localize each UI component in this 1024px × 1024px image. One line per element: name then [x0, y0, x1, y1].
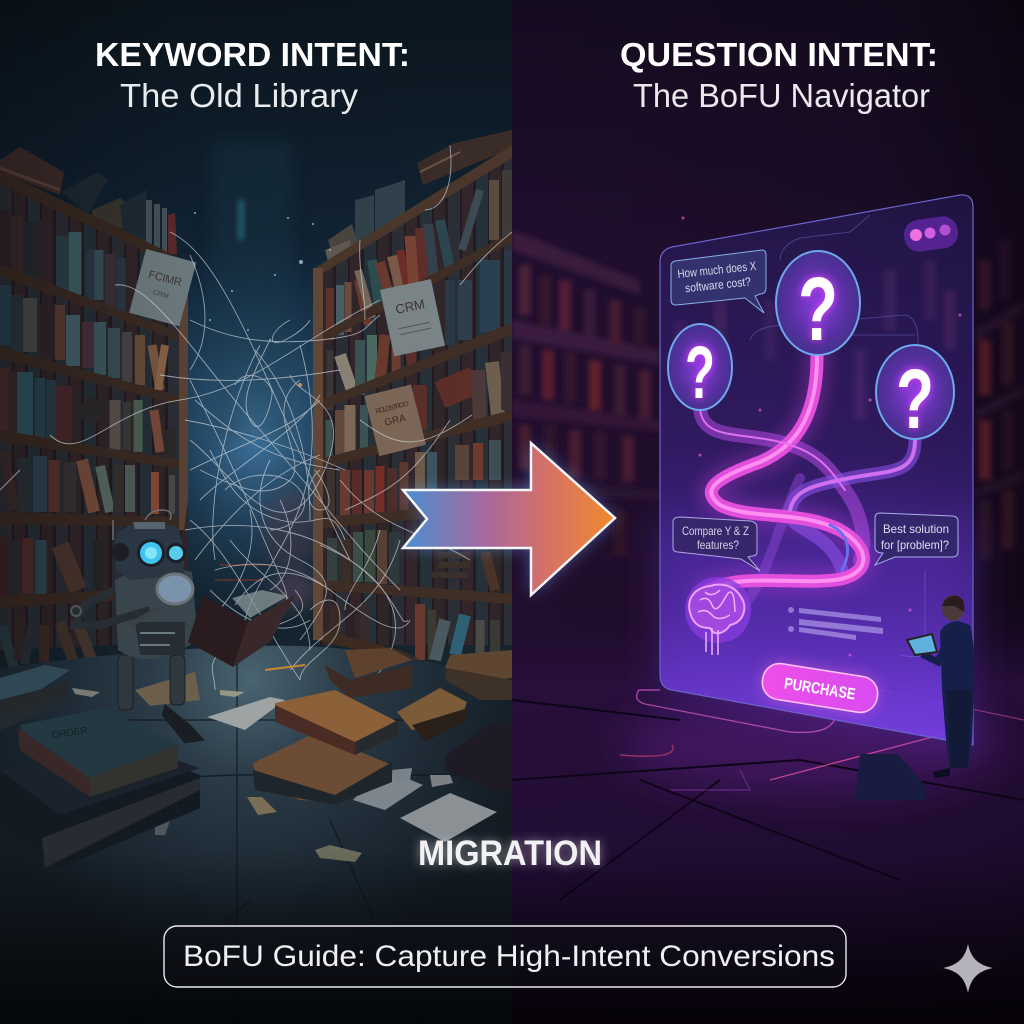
pink flow streams [700, 352, 915, 605]
magnifying glass [130, 574, 193, 625]
heading: keyword intent: The Old Library [120, 77, 359, 114]
speech bubble: software cost: software cost? [684, 274, 752, 295]
speech bubble: best solution [875, 513, 958, 565]
dust particles [194, 212, 331, 387]
icon: sparkle watermark [943, 944, 993, 993]
footer pill: guide [164, 926, 846, 987]
question bubble: center [776, 251, 860, 360]
icon: robot with magnifying glass and open book [71, 510, 295, 743]
tangled wires [0, 145, 512, 690]
books on top of left shelf [0, 147, 177, 262]
panel: right BoFU navigator scene [512, 0, 1024, 1024]
question bubble: left: ? [685, 331, 715, 414]
robot antenna [113, 510, 171, 540]
labeled book: CRM right: CRM [394, 296, 426, 317]
labeled book: CRM left: FCIMR [147, 269, 183, 289]
robot legs [118, 655, 204, 743]
right book row 5 [332, 530, 495, 590]
robot head [115, 522, 184, 580]
label: migration: MIGRATION [418, 834, 602, 873]
scattered floor papers [72, 665, 497, 862]
large teal and dark books: ORDER [51, 726, 88, 741]
icon: glowing brain [685, 577, 751, 655]
speech bubble: best solution: for [problem]? [881, 538, 949, 552]
books on top of right shelf [325, 130, 512, 262]
right book row 2 [330, 250, 510, 410]
question bubble: center: ? [798, 260, 838, 360]
right book row 6 [335, 604, 495, 660]
floor [8, 646, 512, 924]
purchase button: PURCHASE [783, 675, 857, 704]
robot body [115, 568, 198, 659]
arrow: migration [403, 443, 615, 595]
person holding tablet [907, 595, 974, 778]
book row 4 [4, 452, 172, 514]
labeled book: CRM right [380, 279, 445, 356]
speech bubble: compare: Compare Y & Z [682, 524, 749, 538]
floor with circuit lines [512, 600, 1024, 1024]
labeled book: tan: GRA [383, 413, 407, 429]
speech bubble: compare: features? [697, 538, 739, 552]
panel glow [660, 520, 973, 745]
faint interface outlines [750, 215, 925, 657]
right shelf planks [313, 145, 512, 682]
heading: question intent: QUESTION INTENT: [620, 36, 938, 73]
panel: left old library scene [0, 0, 512, 1024]
blurred library shelves [512, 230, 1024, 560]
robot eyes [137, 539, 186, 567]
dark book right edge [445, 722, 512, 790]
labeled book: CRM left [129, 249, 196, 326]
large teal and dark books [18, 711, 200, 868]
heading: question intent: The BoFU Navigator [633, 77, 930, 114]
book row 3 [4, 368, 170, 458]
labeled book: tan: ROLDSTROO [375, 401, 410, 416]
heading: keyword intent [95, 36, 410, 114]
central aisle glow [188, 146, 313, 615]
right book row 3 [329, 352, 507, 465]
labeled book: tan [364, 384, 426, 456]
shading over shelves [0, 56, 168, 668]
right book row 4 [331, 440, 495, 520]
heading: keyword intent: KEYWORD INTENT: [95, 36, 410, 73]
tan stacked books [253, 690, 398, 805]
question bubble: left [668, 324, 732, 414]
speech bubble: software cost [671, 250, 766, 313]
question bubble: right [876, 345, 954, 446]
speech bubble: compare [673, 517, 760, 571]
book row 1 [5, 210, 121, 312]
open book [188, 590, 295, 667]
small stacked books on floor [0, 648, 512, 742]
robot arm [75, 590, 150, 625]
heading: question intent [620, 36, 938, 114]
book row 2 [4, 285, 165, 390]
right book row 1 [330, 170, 507, 340]
interface text lines [788, 607, 883, 640]
book row 5 [4, 537, 98, 596]
speech bubble: best solution: Best solution [883, 522, 949, 536]
hexagonal floor block [855, 754, 925, 800]
sparkles [682, 216, 962, 692]
left shelf planks [0, 172, 188, 608]
speech bubble: software cost: How much does X [677, 259, 757, 281]
footer pill: guide: BoFU Guide: Capture High-Intent Conversions [183, 940, 835, 973]
window dots [902, 214, 960, 254]
purchase button [760, 661, 880, 715]
book row 6 [2, 618, 92, 668]
question bubble: right: ? [896, 352, 934, 446]
left bookshelf [0, 147, 196, 682]
holographic navigator panel [660, 195, 973, 745]
labeled book: CRM left: CRM [152, 289, 170, 300]
right bookshelf [313, 130, 512, 682]
